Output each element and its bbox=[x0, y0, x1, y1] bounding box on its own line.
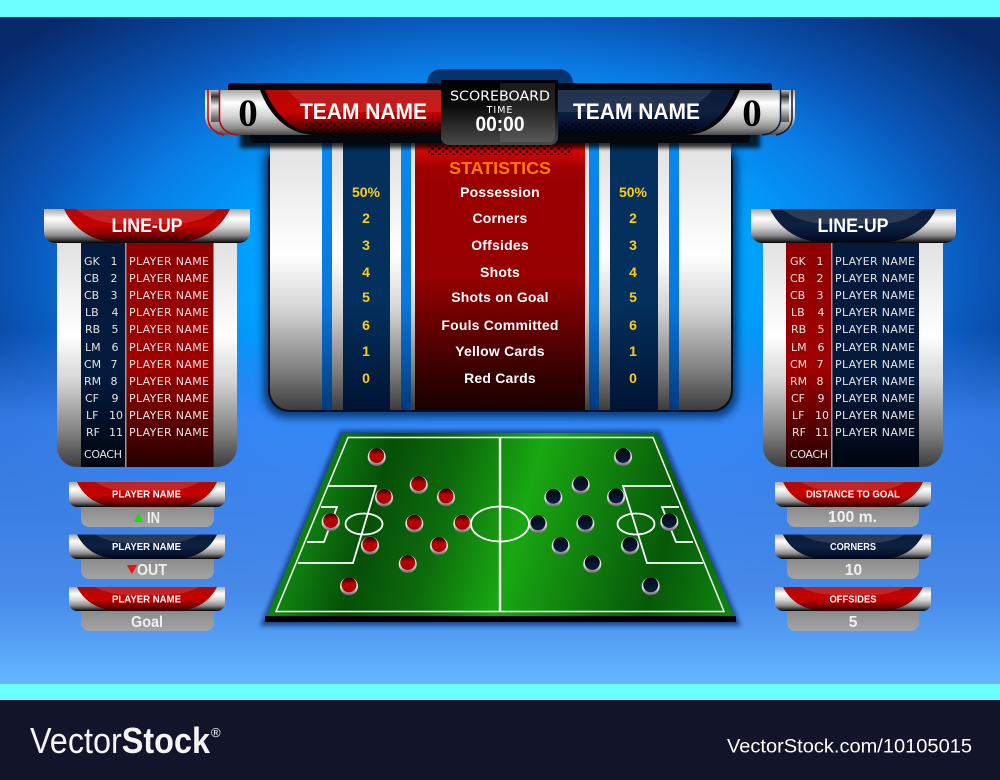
center time box: 00:00 bbox=[476, 113, 524, 136]
left roster: CB bbox=[84, 289, 99, 302]
left roster: 1 bbox=[110, 255, 118, 268]
right roster: PLAYER NAME bbox=[835, 255, 915, 268]
registered mark: ® bbox=[211, 725, 221, 740]
callout: distance to goal bbox=[775, 482, 931, 527]
left roster: 10 bbox=[109, 409, 123, 422]
icon: green up triangle bbox=[134, 513, 143, 522]
stat rows: 6 bbox=[629, 317, 637, 333]
left roster: PLAYER NAME bbox=[129, 323, 209, 336]
right team name: TEAM NAME bbox=[573, 99, 700, 124]
callout: offsides: 5 bbox=[849, 614, 858, 631]
stat rows: Corners bbox=[472, 210, 528, 226]
left roster: CM bbox=[84, 358, 101, 371]
stat rows bbox=[352, 184, 648, 386]
callout: offsides bbox=[775, 587, 931, 631]
right roster: 2 bbox=[816, 272, 824, 285]
red team players bbox=[322, 448, 471, 595]
stat rows: 50% bbox=[352, 184, 381, 200]
left team name: TEAM NAME bbox=[300, 99, 427, 124]
left roster: RB bbox=[85, 323, 100, 336]
right roster: PLAYER NAME bbox=[835, 323, 915, 336]
panel: right line-up bbox=[751, 209, 956, 467]
left line-up header bbox=[44, 209, 250, 243]
callout: corners bbox=[775, 534, 931, 579]
stat rows: Shots bbox=[480, 264, 520, 280]
right roster: 5 bbox=[818, 323, 824, 336]
callout: player in: IN bbox=[147, 510, 160, 527]
left roster: GK bbox=[84, 255, 101, 268]
callout: offsides: OFFSIDES bbox=[830, 594, 877, 606]
right line-up header: LINE-UP bbox=[818, 215, 888, 237]
footer bar bbox=[0, 700, 1000, 780]
callout: player in bbox=[69, 482, 225, 527]
callout: player out: OUT bbox=[137, 562, 167, 579]
stat rows: Offsides bbox=[471, 237, 529, 253]
left roster: PLAYER NAME bbox=[129, 409, 209, 422]
scoreboard header bbox=[205, 69, 795, 148]
left roster: LF bbox=[86, 409, 98, 422]
right roster: LM bbox=[791, 341, 807, 354]
top cyan band bbox=[0, 0, 1000, 17]
callout: player out: PLAYER NAME bbox=[112, 542, 181, 553]
callout: corners: 10 bbox=[845, 562, 862, 579]
left roster bbox=[84, 255, 209, 461]
right roster: 10 bbox=[815, 409, 829, 422]
right roster: PLAYER NAME bbox=[835, 375, 915, 388]
left roster: 6 bbox=[112, 341, 118, 354]
left roster: PLAYER NAME bbox=[129, 358, 209, 371]
pitch lines bbox=[276, 437, 724, 612]
left roster: CB bbox=[84, 272, 99, 285]
right roster: PLAYER NAME bbox=[835, 272, 915, 285]
left roster: 2 bbox=[110, 272, 118, 285]
callout: goal: PLAYER NAME bbox=[112, 594, 181, 606]
callout: distance to goal: 100 m. bbox=[828, 509, 877, 526]
right roster: PLAYER NAME bbox=[835, 289, 915, 302]
right score plate bbox=[555, 90, 795, 135]
right roster: 1 bbox=[816, 255, 824, 268]
left roster: PLAYER NAME bbox=[129, 392, 209, 405]
stat rows: 0 bbox=[362, 370, 370, 386]
stat rows: Yellow Cards bbox=[455, 343, 545, 359]
left roster: 7 bbox=[110, 358, 118, 371]
navy team players bbox=[529, 448, 678, 595]
left roster: LB bbox=[85, 306, 99, 319]
right roster: PLAYER NAME bbox=[835, 409, 915, 422]
stat rows: 1 bbox=[362, 343, 370, 359]
center time box bbox=[441, 80, 558, 145]
left roster: PLAYER NAME bbox=[129, 306, 209, 319]
stat rows: Red Cards bbox=[464, 370, 536, 386]
football pitch bbox=[260, 430, 741, 626]
icon: red down triangle bbox=[127, 565, 137, 574]
right roster: LB bbox=[791, 306, 805, 319]
stat rows: 5 bbox=[362, 289, 370, 305]
right roster: CB bbox=[790, 289, 805, 302]
heading: statistics: STATISTICS bbox=[449, 158, 551, 178]
right roster: COACH bbox=[790, 448, 828, 461]
bottom cyan band bbox=[0, 684, 1000, 700]
right roster: 11 bbox=[815, 426, 829, 439]
left roster: RM bbox=[84, 375, 101, 388]
left roster: 3 bbox=[110, 289, 118, 302]
stat rows: 6 bbox=[362, 317, 370, 333]
right roster bbox=[790, 255, 915, 461]
left line-up header: LINE-UP bbox=[112, 215, 182, 237]
right roster: PLAYER NAME bbox=[835, 306, 915, 319]
right score: 0 bbox=[742, 92, 762, 135]
right roster: PLAYER NAME bbox=[835, 426, 915, 439]
callout: corners: CORNERS bbox=[830, 542, 876, 553]
right roster: 8 bbox=[816, 375, 824, 388]
left roster: 5 bbox=[112, 323, 118, 336]
center time box: SCOREBOARD bbox=[450, 88, 550, 104]
left roster: PLAYER NAME bbox=[129, 272, 209, 285]
left score plate bbox=[205, 90, 445, 135]
left roster: PLAYER NAME bbox=[129, 255, 209, 268]
left roster: 11 bbox=[109, 426, 123, 439]
right roster: GK bbox=[790, 255, 807, 268]
stat rows: 5 bbox=[629, 289, 637, 305]
right roster: CB bbox=[790, 272, 805, 285]
left roster: 9 bbox=[112, 392, 118, 405]
panel: left line-up bbox=[44, 209, 250, 467]
stat rows: 4 bbox=[629, 264, 637, 280]
stat rows: Possession bbox=[460, 184, 540, 200]
left score: 0 bbox=[238, 92, 258, 135]
right roster: RM bbox=[790, 375, 807, 388]
right roster: 4 bbox=[818, 306, 824, 319]
right roster: PLAYER NAME bbox=[835, 341, 915, 354]
callout: goal: Goal bbox=[131, 614, 163, 631]
left roster: 4 bbox=[112, 306, 118, 319]
left roster: PLAYER NAME bbox=[129, 341, 209, 354]
right roster: 3 bbox=[816, 289, 824, 302]
stat rows: 3 bbox=[629, 237, 637, 253]
callout: goal bbox=[69, 587, 225, 631]
left roster: LM bbox=[85, 341, 101, 354]
stat rows: Fouls Committed bbox=[441, 317, 559, 333]
left roster: PLAYER NAME bbox=[129, 289, 209, 302]
callout: player in: PLAYER NAME bbox=[112, 490, 181, 500]
footer url: VectorStock.com/10105015 bbox=[727, 736, 972, 758]
right roster: RB bbox=[791, 323, 806, 336]
stat rows: 1 bbox=[629, 343, 637, 359]
left roster: PLAYER NAME bbox=[129, 375, 209, 388]
left roster: PLAYER NAME bbox=[129, 426, 209, 439]
callout: player out bbox=[69, 534, 225, 579]
right roster: CF bbox=[791, 392, 805, 405]
stat rows: 3 bbox=[362, 237, 370, 253]
right roster: 9 bbox=[818, 392, 824, 405]
footer logo: VectorStock bbox=[30, 720, 211, 761]
right roster: RF bbox=[792, 426, 806, 439]
right roster: PLAYER NAME bbox=[835, 392, 915, 405]
stat rows: 0 bbox=[629, 370, 637, 386]
left roster: CF bbox=[85, 392, 99, 405]
center time box: TIME bbox=[486, 105, 513, 116]
right roster: 6 bbox=[818, 341, 824, 354]
stat rows: 2 bbox=[629, 210, 637, 226]
right line-up header bbox=[751, 209, 956, 243]
right roster: 7 bbox=[816, 358, 824, 371]
stat rows: Shots on Goal bbox=[451, 289, 549, 305]
stat rows: 50% bbox=[619, 184, 648, 200]
left roster: COACH bbox=[84, 448, 122, 461]
stat rows: 2 bbox=[362, 210, 370, 226]
right roster: CM bbox=[790, 358, 807, 371]
callout: distance to goal: DISTANCE TO GOAL bbox=[806, 490, 900, 500]
left roster: RF bbox=[86, 426, 100, 439]
left roster: 8 bbox=[110, 375, 118, 388]
right roster: LF bbox=[792, 409, 804, 422]
panel: statistics bbox=[263, 140, 738, 418]
right roster: PLAYER NAME bbox=[835, 358, 915, 371]
stat rows: 4 bbox=[362, 264, 370, 280]
